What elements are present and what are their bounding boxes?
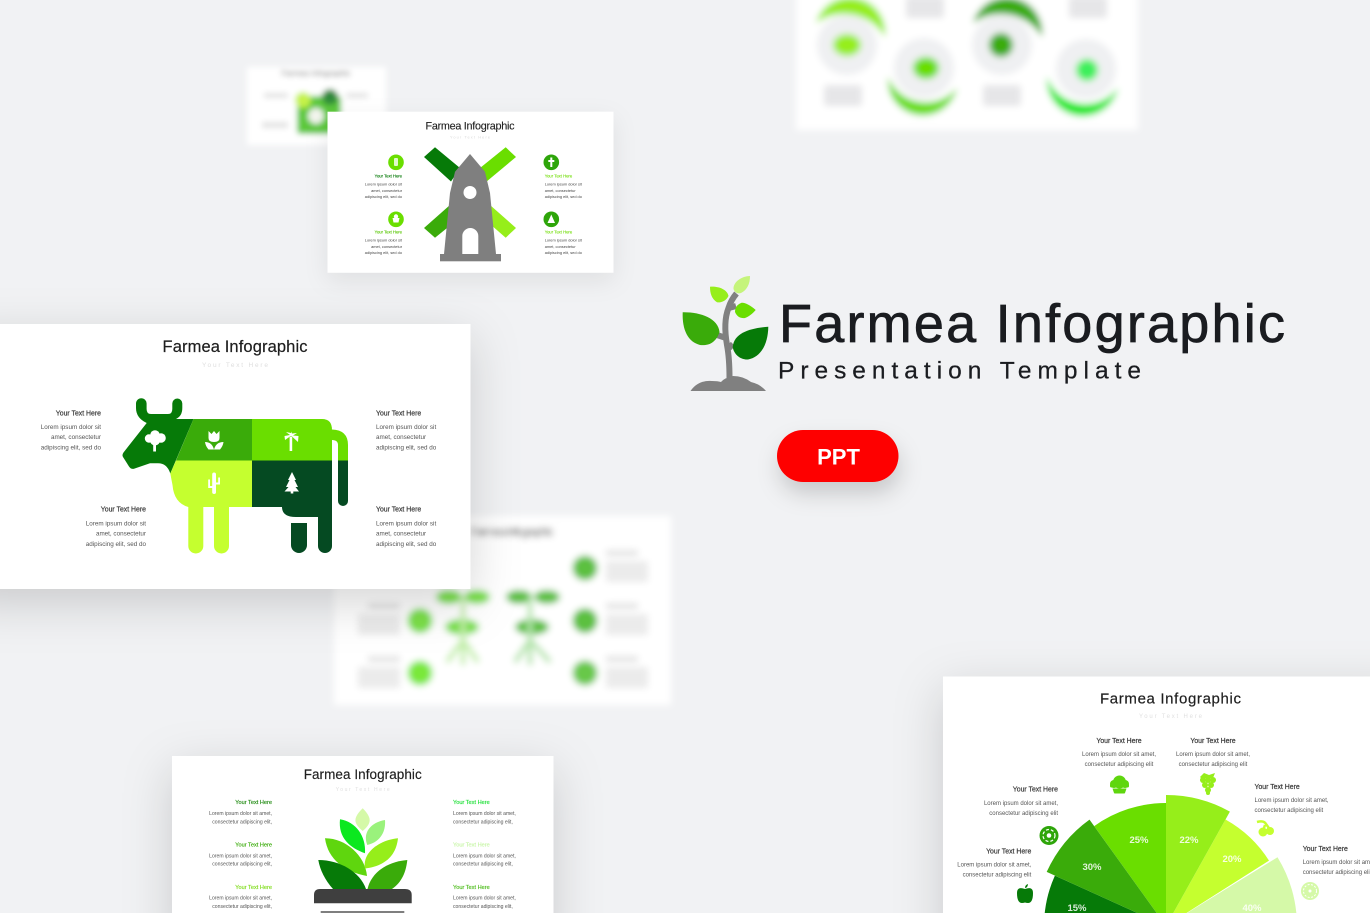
- badge: PPT button: [777, 430, 898, 482]
- panel: blurred small slide: [247, 67, 386, 145]
- text: pie label 3: Lorem ipsum dolor sit amet,: [1254, 798, 1329, 804]
- text: windmill left labels: [365, 173, 403, 255]
- icon: cactus: [208, 472, 220, 494]
- text: pie label 6: Your Text Here: [986, 848, 1031, 856]
- text: cow upper right: Your Text Here: [376, 410, 421, 418]
- text: pie label 3: Your Text Here: [1254, 784, 1300, 791]
- heading: Farmea Infographic: [162, 338, 308, 356]
- subheading: Your Text Here: [1139, 714, 1203, 720]
- text: windmill left labels: amet, consectetur: [371, 244, 403, 249]
- text: pie label 3: consectetur adipiscing elit: [1254, 808, 1324, 814]
- text: plant left labels: consectetur adipiscing elit,: [212, 819, 272, 825]
- text: plant right labels: Lorem ipsum dolor sit amet,: [453, 853, 516, 859]
- text: cow upper right: amet, consectetur: [376, 434, 426, 441]
- text: pie label 5: Your Text Here: [1013, 786, 1058, 794]
- text: cow lower left: Your Text Here: [101, 506, 146, 514]
- icon: donut: [1040, 826, 1058, 845]
- panel: blurred sprout slide: [334, 516, 671, 705]
- text: pie label 2: consectetur adipiscing elit: [1179, 762, 1248, 768]
- text: windmill right labels: Your Text Here: [545, 229, 573, 234]
- text: pie label 4: Your Text Here: [1303, 846, 1348, 853]
- percentage labels: 20%: [1222, 854, 1242, 865]
- icon: tree: [145, 430, 166, 452]
- text: windmill right labels: Your Text Here: [545, 173, 573, 178]
- text: pie label 1: Lorem ipsum dolor sit amet,: [1082, 752, 1156, 758]
- text: plant right labels: consectetur adipiscing elit,: [453, 904, 513, 910]
- panel: plant slide: [172, 756, 554, 913]
- text: plant right labels: [453, 800, 516, 910]
- heading: Farmea Infographic: [304, 767, 422, 782]
- percentage labels: 25%: [1129, 835, 1149, 846]
- icon: tulip: [205, 431, 224, 450]
- text: cow lower right: adipiscing elit, sed do: [376, 541, 437, 548]
- text: plant left labels: Lorem ipsum dolor sit amet,: [209, 896, 272, 902]
- text: cow upper left: Lorem ipsum dolor sit: [41, 424, 101, 431]
- subheading: Your Text Here: [336, 787, 390, 793]
- text: windmill left labels: amet, consectetur: [371, 188, 403, 193]
- text: windmill right labels: [545, 173, 583, 255]
- panel: blurred sprout slide: Farmea Infographic: [470, 524, 554, 539]
- text: plant left labels: Lorem ipsum dolor sit amet,: [209, 853, 272, 859]
- icon: grapes: [1200, 773, 1216, 795]
- text: pie label 2: Your Text Here: [1190, 738, 1236, 745]
- text: cow upper right: [376, 410, 437, 452]
- text: plant right labels: Your Text Here: [453, 800, 490, 806]
- text: cow lower right: amet, consectetur: [376, 530, 426, 538]
- text: pie label 5: [984, 786, 1058, 817]
- text: plant right labels: Your Text Here: [453, 885, 490, 891]
- text: cow upper left: adipiscing elit, sed do: [41, 444, 101, 452]
- text: pie label 1: [1082, 738, 1156, 768]
- text: windmill right labels: amet, consectetur: [545, 188, 576, 193]
- text: pie label 1: consectetur adipiscing elit: [1085, 762, 1154, 768]
- text: windmill left labels: Your Text Here: [375, 229, 403, 234]
- text: plant left labels: Your Text Here: [235, 885, 272, 891]
- panel: blurred small slide: Farmea Infographic: [281, 69, 351, 78]
- text: cow upper left: amet, consectetur: [51, 434, 101, 441]
- percentage labels: 30%: [1082, 862, 1102, 873]
- text: pie label 6: [957, 848, 1032, 878]
- text: plant right labels: consectetur adipiscing elit,: [453, 862, 513, 868]
- chart: cow: [123, 398, 348, 554]
- text: pie label 6: consectetur adipiscing elit: [963, 872, 1032, 878]
- text: cow lower right: Your Text Here: [376, 506, 421, 514]
- text: plant left labels: Your Text Here: [235, 843, 272, 849]
- panel: blurred circles slide: [796, 0, 1138, 130]
- chart: windmill: [424, 147, 516, 261]
- icon: cherries: [1257, 821, 1274, 836]
- heading: Farmea Infographic: [1100, 690, 1242, 708]
- chart: potted plant: [314, 808, 412, 913]
- panel: windmill slide: [328, 112, 614, 273]
- icons: windmill circles: [388, 154, 559, 227]
- text: windmill right labels: Lorem ipsum dolor sit: [545, 238, 583, 242]
- text: plant left labels: Your Text Here: [235, 800, 272, 806]
- text: pie label 4: [1303, 846, 1370, 876]
- text: windmill left labels: adipiscing elit, sed do: [365, 250, 402, 255]
- badge: PPT button: PPT: [817, 444, 860, 470]
- text: windmill left labels: Your Text Here: [375, 173, 403, 178]
- text: windmill left labels: Lorem ipsum dolor sit: [365, 238, 403, 242]
- icon: muffin: [1110, 776, 1129, 794]
- text: windmill right labels: adipiscing elit, sed do: [545, 250, 582, 255]
- text: windmill right labels: amet, consectetur: [545, 244, 576, 249]
- text: pie label 6: Lorem ipsum dolor sit amet,: [957, 862, 1032, 868]
- text: plant right labels: consectetur adipiscing elit,: [453, 819, 513, 825]
- text: pie label 2: Lorem ipsum dolor sit amet,: [1176, 752, 1250, 758]
- text: cow upper left: [41, 410, 101, 452]
- heading: Farmea Infographic: [426, 120, 515, 132]
- text: cow lower right: [376, 506, 437, 548]
- text: plant left labels: consectetur adipiscing elit,: [212, 862, 272, 868]
- text: cow upper right: adipiscing elit, sed do: [376, 444, 437, 452]
- text: plant left labels: Lorem ipsum dolor sit amet,: [209, 811, 272, 817]
- logo: sprout: [683, 276, 768, 391]
- text: plant right labels: Lorem ipsum dolor sit amet,: [453, 811, 516, 817]
- text: pie label 5: Lorem ipsum dolor sit amet,: [984, 801, 1058, 807]
- text: cow lower left: [86, 506, 146, 548]
- text: cow lower left: Lorem ipsum dolor sit: [86, 520, 146, 528]
- text: cow lower left: amet, consectetur: [96, 530, 146, 538]
- text: cow upper left: Your Text Here: [56, 410, 101, 418]
- text: windmill left labels: Lorem ipsum dolor sit: [365, 182, 403, 186]
- text: pie label 3: [1254, 784, 1329, 814]
- percentage labels: 22%: [1179, 835, 1199, 846]
- subtitle: Presentation Template: [778, 358, 1141, 384]
- subheading: Your Text Here: [450, 136, 490, 140]
- text: pie label 4: consectetur adipiscing elit: [1303, 870, 1370, 876]
- text: windmill right labels: adipiscing elit, sed do: [545, 194, 582, 199]
- percentage labels: [1067, 835, 1262, 913]
- text: pie label 1: Your Text Here: [1096, 738, 1142, 745]
- text: cow lower right: Lorem ipsum dolor sit: [376, 520, 436, 528]
- text: plant left labels: consectetur adipiscing elit,: [212, 904, 272, 910]
- subheading: Your Text Here: [202, 362, 268, 369]
- text: pie label 2: [1176, 738, 1250, 768]
- panel: cow slide: [0, 324, 470, 589]
- text: windmill left labels: adipiscing elit, sed do: [365, 194, 402, 199]
- text: cow lower left: adipiscing elit, sed do: [86, 541, 146, 548]
- text: pie label 5: consectetur adipiscing elit: [989, 811, 1058, 817]
- text: cow upper right: Lorem ipsum dolor sit: [376, 424, 436, 431]
- panel: pie slide: [943, 676, 1370, 913]
- icon: palm: [284, 432, 298, 451]
- icon: apple: [1017, 884, 1033, 903]
- text: plant left labels: [209, 800, 272, 910]
- text: plant right labels: Your Text Here: [453, 843, 490, 849]
- main title: Farmea Infographic: [779, 294, 1285, 354]
- icon: citrus slice: [1301, 882, 1319, 900]
- chart: pie: [1044, 795, 1297, 913]
- text: plant right labels: Lorem ipsum dolor sit amet,: [453, 896, 516, 902]
- text: windmill right labels: Lorem ipsum dolor sit: [545, 182, 583, 186]
- icon: pine: [284, 472, 299, 494]
